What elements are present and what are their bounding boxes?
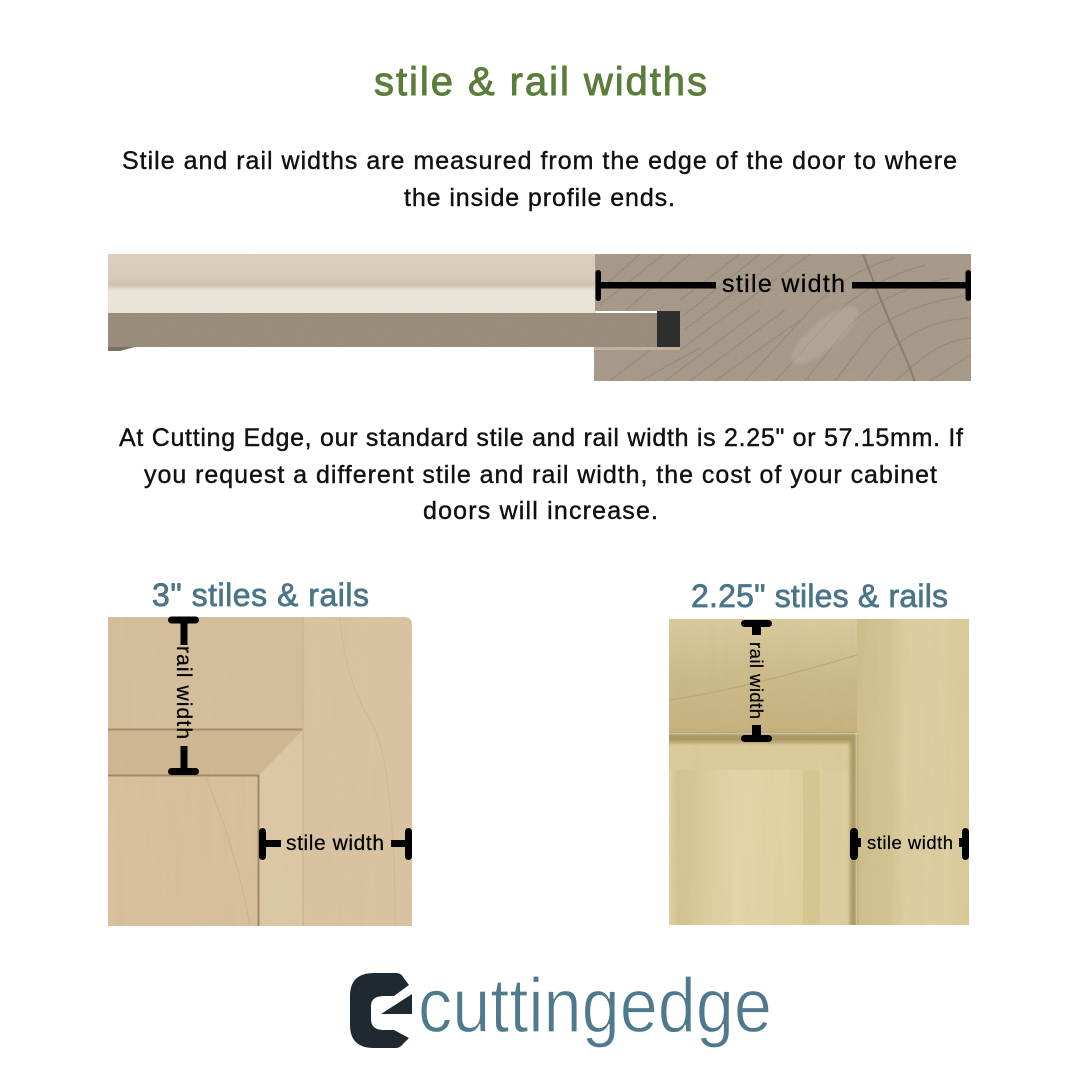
top rail [108,617,303,729]
intro text block: the inside profile ends. [404,184,675,212]
rail width dimension: rail width [172,646,195,739]
stile width dimension [259,828,412,860]
intro text block: Stile and rail widths are measured from the edge of the door to where [122,147,957,175]
standard width text block: At Cutting Edge, our standard stile and rail width is 2.25" or 57.15mm. If [119,424,963,452]
logo wordmark: cuttingedge [418,963,772,1049]
cross-section photo with stile width measure [108,254,971,382]
rail width dimension [168,616,199,775]
photo: 2.25 inch door corner [660,619,969,940]
stile width dimension [596,270,971,301]
door wood and shadows [660,619,969,940]
rail bevel [108,730,303,775]
standard width text block [119,424,963,525]
photo: 3 inch door corner [108,616,412,926]
groove lip [594,347,680,350]
rail width dimension [741,620,772,742]
MDF centre panel [108,313,657,351]
intro text block [122,147,957,212]
upper panel surface [108,254,596,313]
stile width dimension: stile width [867,832,953,853]
standard width text block: doors will increase. [423,497,658,525]
centre panel [108,776,258,926]
stile width dimension: stile width [722,270,845,298]
inner stile bevel [259,731,303,926]
black slot [657,311,680,347]
rail width dimension: rail width [746,642,767,719]
logo [350,963,772,1049]
stile cross-section [594,254,971,382]
title: stile & rail widths [374,60,707,104]
heading: 3 inch: 3" stiles & rails [152,577,369,613]
standard width text block: you request a different stile and rail width, the cost of your cabinet [144,461,937,489]
stile width dimension: stile width [286,832,384,855]
door wood [108,617,412,926]
stile width dimension [850,828,969,860]
logo icon [350,973,412,1048]
heading: 2.25 inch: 2.25" stiles & rails [691,578,948,614]
